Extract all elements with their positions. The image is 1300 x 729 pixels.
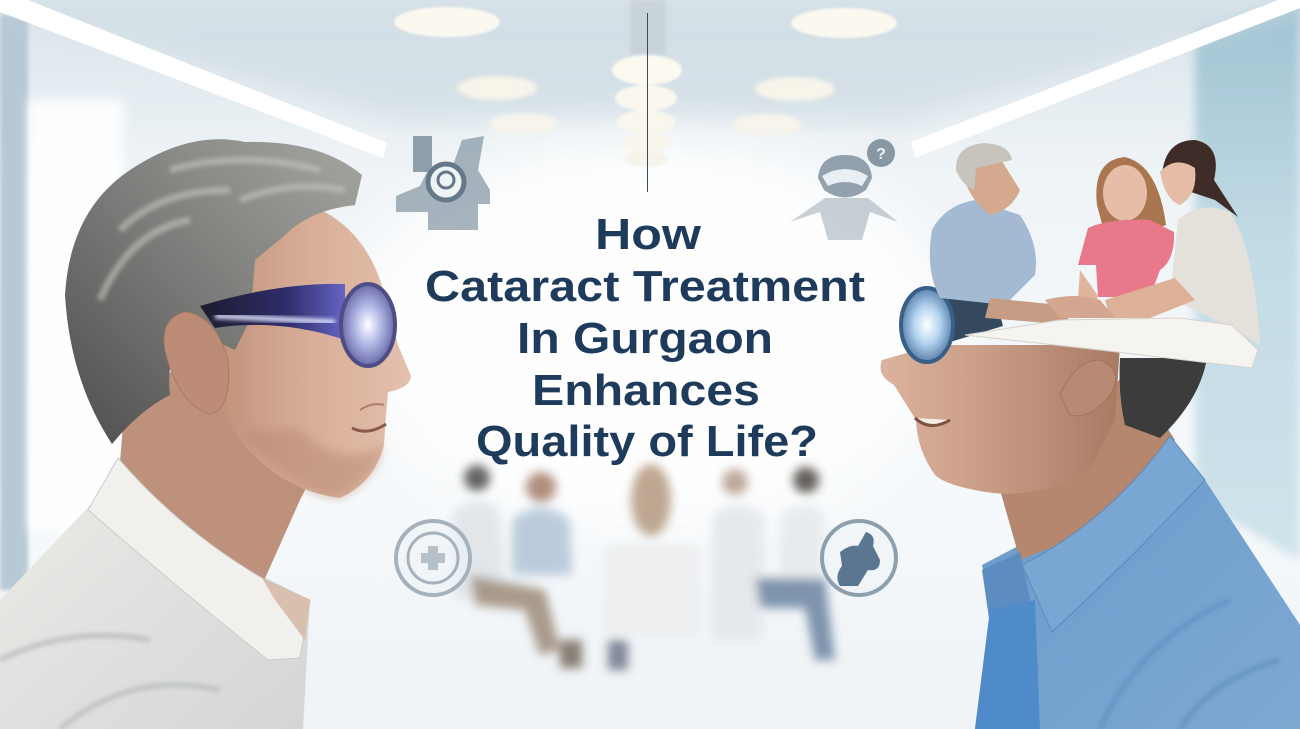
left man [0,139,411,729]
icon: medical equipment [396,136,490,230]
right man collar [1022,436,1205,632]
right man hair [1120,358,1207,438]
ceiling lights [394,0,897,192]
left man neck [120,330,330,585]
right man shirt [975,436,1300,729]
title: How [595,210,702,259]
left man face [190,207,411,498]
father [930,143,1078,324]
title: Enhances [532,366,760,415]
title [425,210,865,466]
left man collar [88,458,310,660]
right man smile [915,418,950,426]
icon: person with speech bubble [790,139,898,240]
right man visor [945,296,1003,342]
mother [1105,140,1260,345]
blurred people in background [452,464,835,670]
left man ear [164,312,229,414]
tabletop [965,318,1258,368]
diagonal light strips [0,0,1300,158]
family on table [930,140,1260,368]
icon: figure badge [822,521,896,595]
daughter [1078,157,1174,316]
right man face [880,345,1120,494]
title: In Gurgaon [517,314,773,363]
title: Quality of Life? [476,417,818,466]
left man hair [65,139,362,444]
icon: person with speech bubble: ? [876,146,886,163]
left man shirt [0,458,310,729]
icon: medical plus badge [396,521,470,595]
right man ear [1060,360,1116,416]
clasped hands [1045,296,1115,318]
title: Cataract Treatment [425,262,865,311]
left man smile [352,424,386,431]
right man neck [1000,370,1175,560]
right man [880,288,1300,729]
left man visor [200,284,345,340]
